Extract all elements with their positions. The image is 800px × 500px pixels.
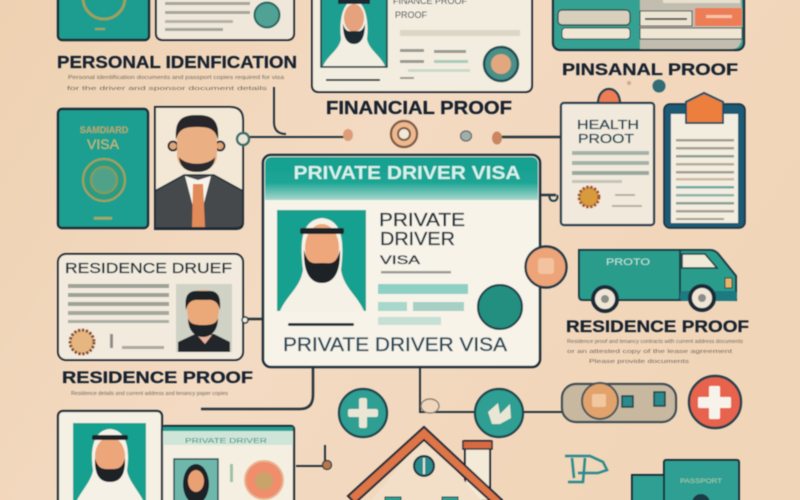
panel: portrait of man in suit xyxy=(155,107,243,229)
panel: financial card xyxy=(312,0,532,92)
icon: house xyxy=(348,427,502,500)
icon: connector pin xyxy=(322,460,332,470)
panel: top passport xyxy=(58,0,149,40)
panel: passport: VISA xyxy=(87,136,120,152)
card footer text: PRIVATE DRIVER VISA xyxy=(283,335,507,356)
icon: small connector clip xyxy=(550,195,558,201)
icon: teal emblem circle xyxy=(421,389,523,437)
panel: bottom right passports: PASSPORT xyxy=(680,478,722,485)
panel: financial card: PROOF xyxy=(395,10,428,20)
card title: PRIVATE DRIVER VISA xyxy=(294,162,520,183)
panel: health proof document: PROOT xyxy=(578,131,634,146)
heading: residence proof right: Residence proof and tenancy contracts with current address documents xyxy=(567,339,743,345)
icon: teal plus circle xyxy=(339,389,387,437)
panel: clipboard xyxy=(664,93,745,228)
panel: bottom left portrait card xyxy=(58,411,162,500)
heading: financial proof: FINANCIAL PROOF xyxy=(326,98,512,118)
heading: residence proof left xyxy=(62,368,253,397)
panel: passport: SAMDIARD xyxy=(80,125,129,135)
heading: personal identification: for the driver and sponsor document details xyxy=(67,86,267,92)
heading: personal identification: Personal identification documents and passport copies required for visa xyxy=(68,75,285,81)
panel: top right financial card xyxy=(553,0,744,50)
card subtitle xyxy=(379,209,465,267)
panel: bottom right passports xyxy=(632,460,739,500)
heading: personal proof: PINSANAL PROOF xyxy=(562,60,738,79)
heading: residence proof right xyxy=(566,317,749,365)
icon: small teal mark xyxy=(565,456,607,482)
card subtitle: PRIVATE xyxy=(379,209,465,230)
card subtitle: VISA xyxy=(380,253,420,267)
residence card photo xyxy=(176,284,232,352)
heading: personal identification xyxy=(57,52,297,92)
panel: passport xyxy=(58,109,148,228)
heading: residence proof left: Residence details and current address and tenancy paper copies xyxy=(71,391,228,397)
icon: key fob with coin xyxy=(562,383,676,422)
heading: personal identification: PERSONAL IDENFICATION xyxy=(57,52,297,72)
connector lines xyxy=(201,87,562,466)
panel: top identification card xyxy=(156,0,294,40)
panel: bottom driver card: PRIVATE DRIVER xyxy=(185,436,268,445)
card photo xyxy=(277,210,366,311)
heading: residence proof right: RESIDENCE PROOF xyxy=(566,317,749,336)
icon: red plus circle xyxy=(689,376,741,428)
icon: connector dots xyxy=(627,80,666,92)
panel: central private driver visa card xyxy=(263,155,540,367)
card seal xyxy=(478,285,522,329)
heading: residence proof right: Please provide documents xyxy=(589,359,689,365)
panel: bottom driver card xyxy=(162,426,294,500)
card header xyxy=(265,157,538,200)
heading: residence proof left: RESIDENCE PROOF xyxy=(62,368,253,387)
panel: residence card xyxy=(58,254,248,360)
icon: orange coin xyxy=(526,246,566,288)
icon: delivery van xyxy=(579,250,737,311)
panel: health proof document: HEALTH xyxy=(577,117,639,132)
panel: health proof document xyxy=(561,89,654,225)
connector node left xyxy=(237,129,353,145)
icon: delivery van: PROTO xyxy=(606,257,650,268)
heading: residence proof right: or an attested copy of the lease agreement xyxy=(567,349,733,355)
panel: residence card: RESIDENCE DRUEF xyxy=(65,260,232,277)
card subtitle: DRIVER xyxy=(380,228,455,249)
icon: round coin connector xyxy=(391,121,502,147)
